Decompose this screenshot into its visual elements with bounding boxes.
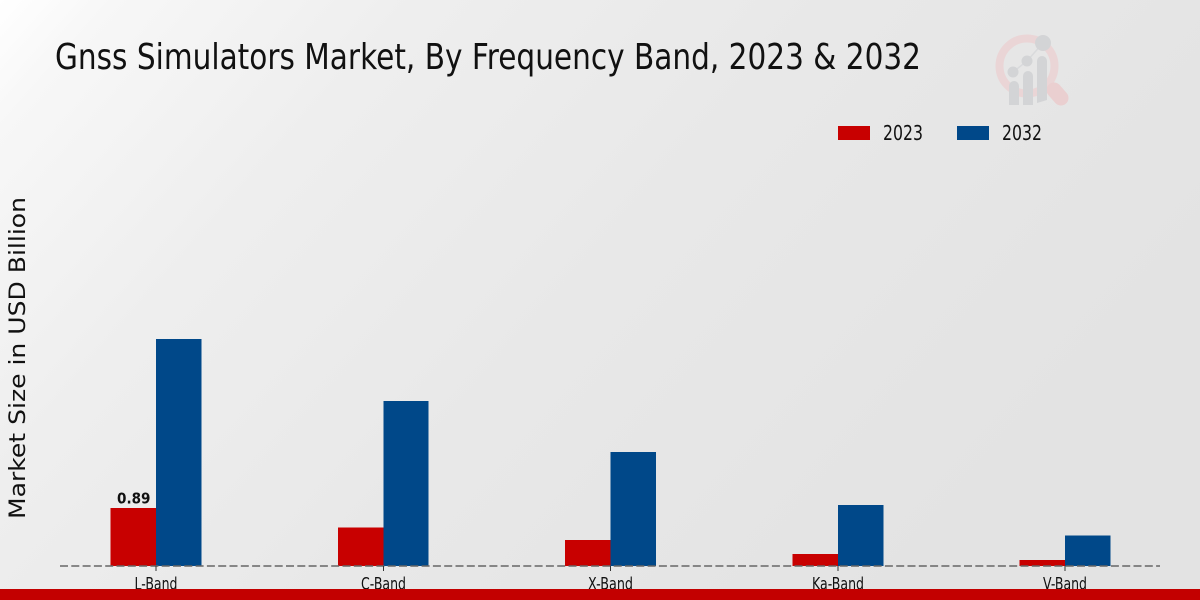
footer bar — [0, 589, 1200, 600]
V-Band bars — [1020, 536, 1110, 566]
legend item: 2032: 2032 — [1002, 121, 1042, 145]
value label: 0.89 — [117, 490, 150, 508]
category labels: V-Band — [1043, 574, 1087, 594]
X-Band bars — [565, 452, 656, 566]
category labels: Ka-Band — [812, 574, 864, 594]
legend item: 2023 — [838, 121, 923, 145]
bar chart — [60, 339, 1160, 571]
legend item: 2032 — [957, 121, 1042, 145]
legend — [838, 121, 1042, 145]
Ka-Band bars — [792, 505, 884, 566]
category labels: X-Band — [588, 574, 633, 594]
baseline — [60, 565, 1160, 567]
icon: watermark logo — [1000, 35, 1061, 105]
category labels — [134, 574, 1087, 594]
legend item: 2023: 2023 — [883, 121, 923, 145]
title: Gnss Simulators Market, By Frequency Band, 2023 & 2032 — [55, 37, 921, 78]
category labels: C-Band — [361, 574, 406, 594]
y axis label: Market Size in USD Billion — [5, 197, 31, 519]
category labels: L-Band — [134, 574, 178, 594]
C-Band bars — [338, 401, 428, 566]
L-Band bars — [110, 339, 202, 566]
